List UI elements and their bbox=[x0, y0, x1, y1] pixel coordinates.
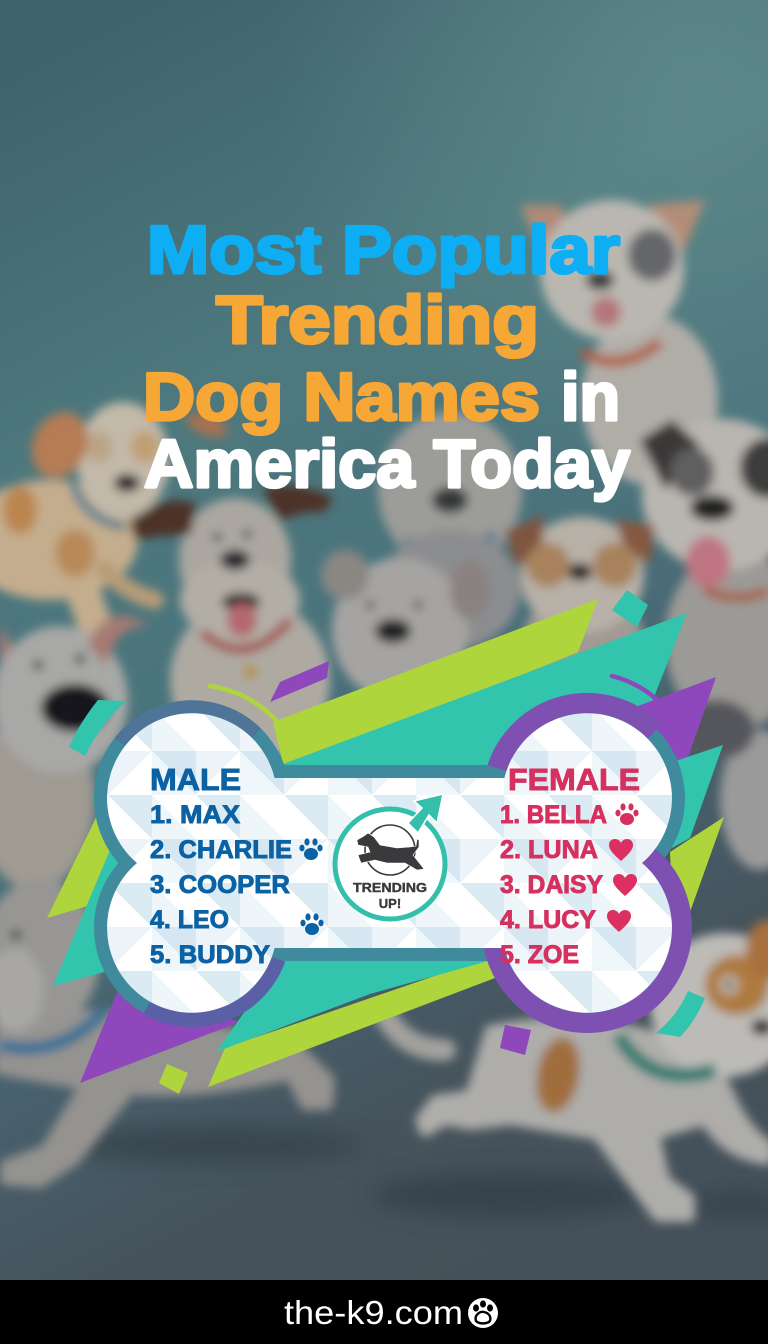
dog left low bbox=[0, 616, 150, 890]
female list bbox=[500, 762, 640, 969]
badge text bbox=[353, 881, 427, 911]
dog bottom right bbox=[420, 920, 768, 1217]
dog far centre bbox=[378, 412, 522, 650]
badge circle bbox=[335, 809, 445, 919]
dog top right bbox=[520, 200, 718, 485]
male heading: MALE bbox=[150, 762, 241, 797]
bone graphic bbox=[47, 590, 724, 1094]
title line 2: Trending bbox=[216, 282, 539, 358]
dog centre open mouth bbox=[130, 485, 333, 762]
male name 4: 4. LEO bbox=[150, 906, 229, 934]
arrow bbox=[408, 794, 443, 833]
badge text: TRENDING bbox=[353, 881, 427, 895]
male name 1: 1. MAX bbox=[150, 801, 240, 829]
male name 2: 2. CHARLIE bbox=[150, 836, 292, 864]
title line 3 white: in bbox=[561, 359, 620, 435]
dog bottom left bbox=[0, 880, 445, 1183]
icon: heart 3 bbox=[607, 910, 631, 932]
badge text: UP! bbox=[379, 896, 401, 911]
icon: footer paw bbox=[468, 1298, 498, 1328]
title line 3: Dog Names bbox=[143, 359, 540, 435]
male name 3: 3. COOPER bbox=[150, 871, 290, 899]
orbit ring bbox=[365, 825, 415, 875]
female name 2: 2. LUNA bbox=[500, 836, 598, 864]
icon: blue paw 1 bbox=[299, 838, 323, 860]
female name 4: 4. LUCY bbox=[500, 906, 596, 934]
floor shadows bbox=[65, 1127, 768, 1217]
male list bbox=[150, 762, 292, 969]
dog left tan bbox=[0, 402, 231, 625]
female name 5: 5. ZOE bbox=[500, 941, 579, 969]
background dogs bbox=[0, 200, 768, 1217]
female name 3: 3. DAISY bbox=[500, 871, 603, 899]
confetti accents bbox=[69, 590, 705, 1094]
trending up badge bbox=[335, 794, 445, 919]
icon: heart 2 bbox=[613, 874, 637, 896]
title bbox=[143, 212, 630, 502]
footer bar bbox=[0, 1280, 768, 1344]
title line 1: Most Popular bbox=[147, 212, 620, 288]
female heading: FEMALE bbox=[508, 762, 640, 797]
footer site name: the-k9.com bbox=[284, 1294, 463, 1331]
icon: running dog bbox=[357, 833, 424, 870]
dog small tan bbox=[505, 515, 655, 690]
icon: blue paw 2 bbox=[300, 913, 324, 935]
dog right large bbox=[640, 419, 768, 730]
icon: pink paw bbox=[615, 803, 639, 825]
angular shapes behind bone bbox=[47, 599, 724, 1087]
bone fill bbox=[107, 713, 672, 1013]
bone outline bbox=[107, 703, 682, 1023]
female name 1: 1. BELLA bbox=[500, 801, 607, 829]
male name 5: 5. BUDDY bbox=[150, 941, 270, 969]
icon: heart 1 bbox=[609, 839, 633, 861]
title line 4: America Today bbox=[144, 426, 630, 502]
dog right mid bbox=[675, 700, 768, 870]
dog grey centre bbox=[321, 550, 490, 760]
